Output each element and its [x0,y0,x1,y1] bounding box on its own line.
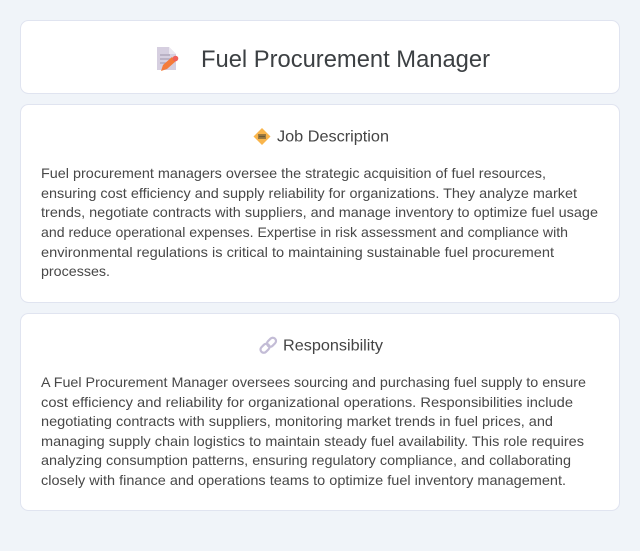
text block: responsibility: cost efficiency and reliability for organizational operations. Responsibilities include [41,394,573,410]
text block: job description: Fuel procurement managers oversee the strategic acquisition of fuel resources, [41,165,546,181]
text block: responsibility: managing supply chain logistics to maintain steady fuel availability. This role requires [41,433,584,449]
panel: title [20,20,620,94]
icon: chain link [259,336,277,354]
title text: Fuel Procurement Manager [201,46,490,73]
text block: job description: and reduce operational expenses. Expertise in risk assessment and compliance with [41,224,568,240]
text block: job description: environmental regulations is critical to maintaining sustainable fuel procurement [41,244,554,260]
text block: responsibility [41,374,586,488]
icon: document with pencil [157,47,178,71]
text block: job description [41,165,598,279]
icon: diamond sign [254,128,270,145]
panel: job description [20,104,620,302]
text block: job description: trends, negotiate contracts with suppliers, and manage inventory to optimize fuel usage [41,204,598,220]
text block: responsibility: closely with finance and operations teams to optimize fuel inventory management. [41,472,566,488]
text block: job description: processes. [41,263,110,279]
heading: responsibility: Responsibility [283,338,383,354]
text block: job description: ensuring cost efficiency and supply reliability for organizations. They analyze market [41,185,577,201]
heading: job description: Job Description [277,128,389,146]
text block: responsibility: negotiating contracts with suppliers, monitoring market trends in fuel prices, and [41,413,553,429]
text block: responsibility: A Fuel Procurement Manager oversees sourcing and purchasing fuel supply to ensure [41,374,586,390]
text block: responsibility: analyzing consumption patterns, ensuring regulatory compliance, and collaborating [41,452,571,468]
panel: responsibility [20,314,620,510]
